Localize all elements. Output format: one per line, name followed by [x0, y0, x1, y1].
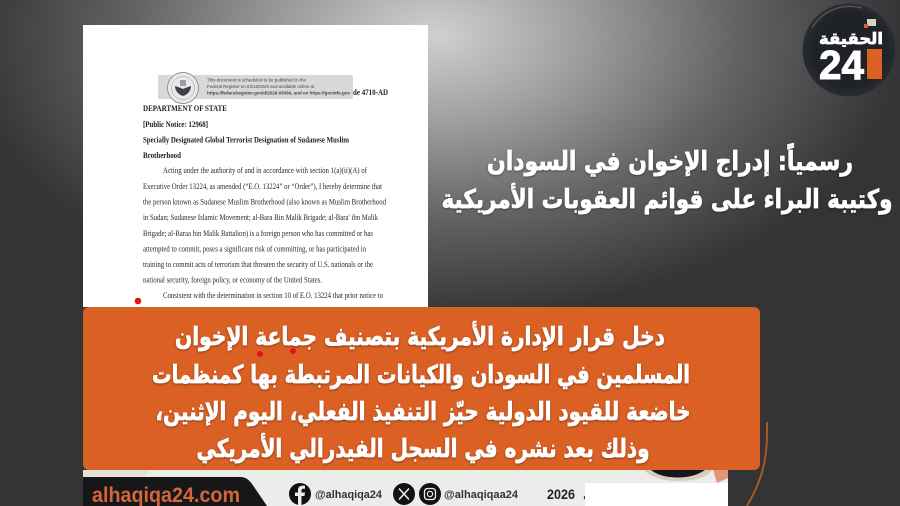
document notice banner	[158, 72, 353, 104]
illustration remnant: orange corner	[713, 470, 728, 483]
summary text: دخل قرار الإدارة الأمريكية بتصنيف جماعة الإخوان	[175, 321, 665, 352]
date fragment: 2026	[547, 486, 575, 502]
facebook handle: @alhaqiqa24	[315, 489, 383, 501]
document heading block	[143, 104, 349, 160]
panel: document	[83, 25, 428, 307]
notice text: https://federalregister.gov/d/2026-05084, and on https://govinfo.gov	[207, 90, 350, 96]
document heading block: [Public Notice: 12968]	[143, 120, 208, 129]
notice text: Federal Register on 03/16/2026 and available online at	[207, 84, 315, 90]
document body text: national security, foreign policy, or economy of the United States.	[143, 276, 322, 284]
logo square accent	[867, 19, 876, 26]
icon: X	[393, 483, 415, 505]
website badge	[83, 477, 267, 506]
date fragment: arabic letter: ل	[583, 488, 593, 501]
illustration remnant: pale figure	[83, 470, 150, 477]
logo orange bar	[867, 49, 882, 79]
notice text: This document is scheduled to be published in the	[207, 78, 306, 84]
notice text	[207, 78, 350, 96]
document heading block: Brotherhood	[143, 151, 181, 160]
white cover rectangle	[585, 483, 728, 506]
summary text: خاضعة للقيود الدولية حيّز التنفيذ الفعلي، اليوم الإثنين،	[156, 397, 690, 427]
illustration remnant: dark circle	[644, 470, 712, 481]
summary text	[152, 321, 690, 464]
document heading block: DEPARTMENT OF STATE	[143, 104, 227, 113]
seal icon	[168, 72, 198, 104]
document body text: training to commit acts of terrorism that threaten the security of U.S. nationals or the	[143, 260, 373, 269]
summary text: وذلك بعد نشره في السجل الفيدرالي الأمريكي	[196, 433, 650, 464]
icon: instagram	[419, 483, 441, 505]
instagram handle: @alhaqiqaa24	[444, 489, 519, 501]
orange curve behind panel	[747, 422, 767, 506]
logo number: 24	[819, 42, 864, 88]
icon: facebook	[289, 483, 311, 505]
bottom website strip	[83, 470, 728, 506]
document body text: Brigade; al-Baraa bin Malik Battalion) is a foreign person who has committed or has	[143, 229, 373, 238]
document body text: attempted to commit, poses a significant risk of committing, or has participated in	[143, 244, 366, 254]
document body text: Executive Order 13224, as amended (“E.O. 13224” or “Order”), I hereby determine that	[143, 182, 383, 191]
document text	[143, 88, 388, 300]
document body text	[143, 166, 386, 300]
logo arabic name: الحقيقة	[819, 29, 883, 48]
document body text: Acting under the authority of and in accordance with section 1(a)(ii)(A) of	[163, 166, 367, 175]
panel: summary callout	[83, 307, 760, 470]
red dot	[135, 298, 141, 304]
summary text: المسلمين في السودان والكيانات المرتبطة بها كمنظمات	[152, 360, 690, 390]
document heading block: Specially Designated Global Terrorist Designation of Sudanese Muslim	[143, 136, 349, 144]
red dots	[257, 348, 296, 357]
headline	[442, 142, 892, 215]
document code: de 4710-AD	[353, 88, 388, 97]
document body text: Consistent with the determination in section 10 of E.O. 13224 that prior notice to	[163, 291, 383, 300]
document body text: in Sudan; Sudanese Islamic Movement; al-Bara Bin Malik Brigade; al-Bara' ibn Malik	[143, 213, 379, 222]
logo	[802, 4, 896, 96]
document body text: the person known as Sudanese Muslim Brotherhood (also known as Muslim Brotherhood	[143, 198, 386, 206]
